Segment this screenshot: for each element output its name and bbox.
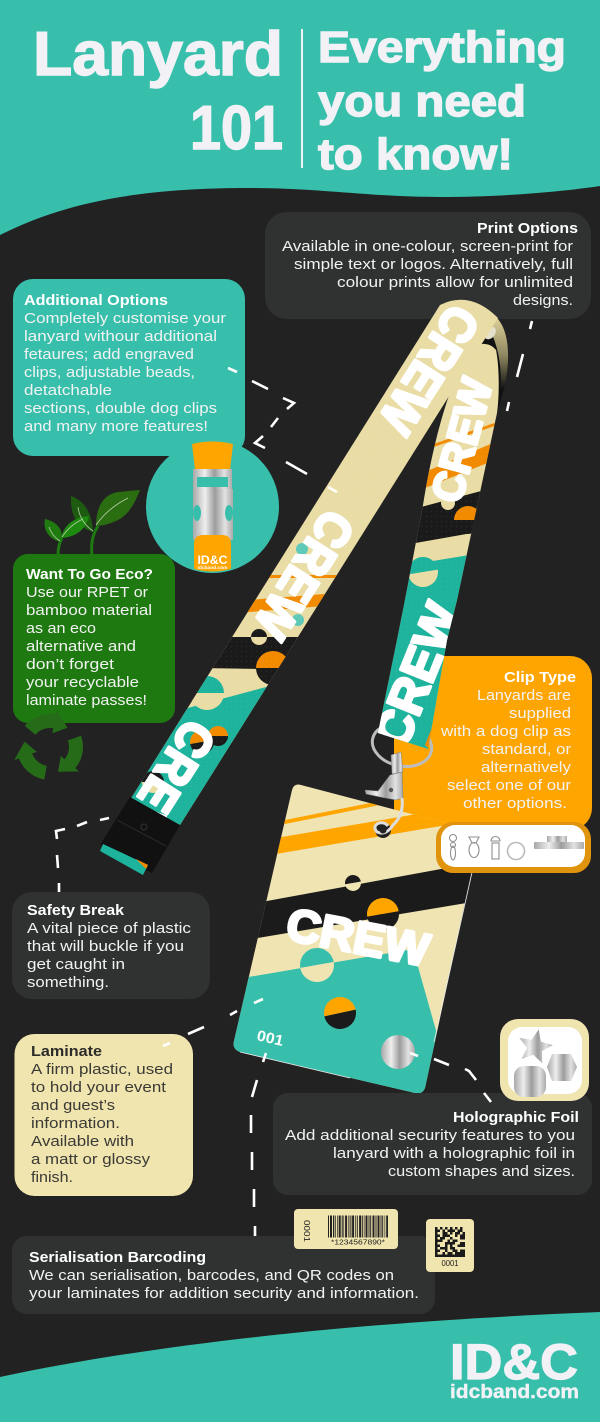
panel: laminate: a matt or glossy (31, 1151, 151, 1168)
panel: print options: designs. (513, 292, 573, 309)
panel: clip type text: with a dog clip as (440, 723, 571, 740)
laminate card: 001 (255, 1027, 285, 1050)
panel: want to go eco: laminate passes! (26, 692, 147, 709)
panel: laminate: and guest’s (31, 1097, 115, 1114)
panel: additional options: Completely customise your (24, 310, 226, 327)
title: you need (318, 77, 526, 126)
panel: serialisation barcoding: your laminates for addition security and information. (29, 1285, 419, 1302)
footer band (0, 1312, 600, 1422)
panel: print options (265, 212, 591, 319)
title: 101 (190, 94, 283, 163)
data matrix tag: 0001 (442, 1259, 459, 1268)
left lanyard strap: CREW (104, 710, 226, 859)
barcode tag (294, 1209, 398, 1249)
logo: idcband.com (450, 1381, 579, 1403)
logo: ID&C (450, 1334, 578, 1390)
panel: additional options: detatchable (24, 382, 112, 399)
barcode tag: *1234567890* (331, 1240, 385, 1246)
left lanyard strap: CREW (243, 500, 365, 649)
panel: laminate: finish. (31, 1169, 73, 1186)
title: Everything (318, 23, 566, 72)
right lanyard strap: CREW (363, 595, 471, 755)
panel: holographic foil: Holographic Foil (453, 1109, 579, 1126)
clip ring (368, 718, 436, 772)
title (33, 20, 566, 179)
panel: holographic foil: lanyard with a holographic foil in (333, 1145, 575, 1162)
panel: want to go eco: bamboo material (26, 602, 152, 619)
clip options thumbnail (436, 822, 591, 873)
panel: additional options: clips, adjustable beads, (24, 364, 195, 381)
right lanyard strap (378, 344, 499, 749)
panel: laminate: A firm plastic, used (31, 1061, 173, 1078)
header band (0, 0, 600, 235)
panel: safety break: get caught in (27, 956, 125, 973)
safety break buckle (100, 797, 180, 875)
barcode tag: 0001 (302, 1220, 312, 1242)
arrow: holographic foil dashes (410, 1053, 491, 1102)
panel: additional options: Additional Options (24, 292, 168, 309)
left lanyard strap (131, 300, 498, 825)
panel: want to go eco: Use our RPET or (26, 584, 148, 601)
laminate card: CREW (282, 898, 434, 976)
panel: additional options: fetaures; add engraved (24, 346, 194, 363)
panel: clip type text: alternatively (481, 759, 572, 776)
arrow: serialisation dashes (251, 1053, 266, 1236)
icon: buckle in circle: ID&C (198, 555, 228, 567)
panel: clip type text: standard, or (482, 741, 571, 758)
arrow: additional options dashes (228, 368, 337, 492)
panel: holographic foil: Add additional security features to you (285, 1127, 575, 1144)
panel: want to go eco: your recyclable (26, 674, 139, 691)
panel: clip type text: select one of our (447, 777, 571, 794)
panel: want to go eco: as an eco (26, 620, 96, 637)
arrow: laminate dashes (163, 999, 263, 1046)
panel: holographic foil (273, 1093, 592, 1195)
title: Lanyard (33, 20, 283, 89)
panel: additional options (13, 279, 245, 456)
panel: laminate: information. (31, 1115, 120, 1132)
lanyard fold (478, 318, 508, 413)
panel: print options: Available in one-colour, screen-print for (282, 238, 573, 255)
panel: safety break: that will buckle if you (27, 938, 184, 955)
panel: safety break (12, 892, 210, 999)
panel: laminate: Available with (31, 1133, 134, 1150)
panel: clip type text: Lanyards are (477, 687, 571, 704)
panel: additional options: lanyard withour additional (24, 328, 217, 345)
panel: print options: colour prints allow for unlimited (337, 274, 573, 291)
panel: clip type text: other options. (463, 795, 567, 812)
right lanyard strap: CREW (422, 373, 503, 508)
panel: print options: simple text or logos. Alternatively, full (294, 256, 573, 273)
icon: recycle (9, 710, 95, 788)
icon: buckle in circle: idcband.com (198, 565, 228, 570)
panel: clip type text: Clip Type (504, 669, 576, 686)
panel: safety break: something. (27, 974, 109, 991)
panel: additional options: and many more features! (24, 418, 208, 435)
panel: safety break: Safety Break (27, 902, 125, 919)
icon: foil shapes (500, 1019, 589, 1101)
panel: want to go eco: Want To Go Eco? (26, 566, 153, 583)
panel: serialisation barcoding (12, 1236, 435, 1314)
panel: serialisation barcoding: Serialisation Barcoding (29, 1249, 206, 1266)
laminate card (234, 784, 472, 1093)
left lanyard strap: CREW (368, 295, 490, 444)
panel: want to go eco: don’t forget (26, 656, 115, 673)
panel: want to go eco: alternative and (26, 638, 136, 655)
arrow: print options dashes (507, 321, 532, 411)
icon: buckle in circle (146, 440, 279, 573)
panel: clip type text: supplied (509, 705, 571, 722)
icon: plant (45, 490, 140, 555)
panel: print options: Print Options (477, 220, 578, 237)
data matrix tag (426, 1219, 474, 1272)
panel background: clip type (394, 656, 592, 830)
arrow: safety break dashes (56, 818, 109, 892)
title: to know! (318, 130, 513, 179)
panel: clip type text (440, 669, 576, 812)
panel: additional options: sections, double dog clips (24, 400, 217, 417)
panel: laminate (14, 1034, 193, 1196)
panel: laminate: to hold your event (31, 1079, 167, 1096)
panel: laminate: Laminate (31, 1043, 102, 1060)
panel: want to go eco (13, 554, 175, 723)
panel: holographic foil: custom shapes and sizes. (388, 1163, 575, 1180)
panel: safety break: A vital piece of plastic (27, 920, 192, 937)
dog clip (365, 752, 403, 834)
panel: serialisation barcoding: We can serialisation, barcodes, and QR codes on (29, 1267, 394, 1284)
